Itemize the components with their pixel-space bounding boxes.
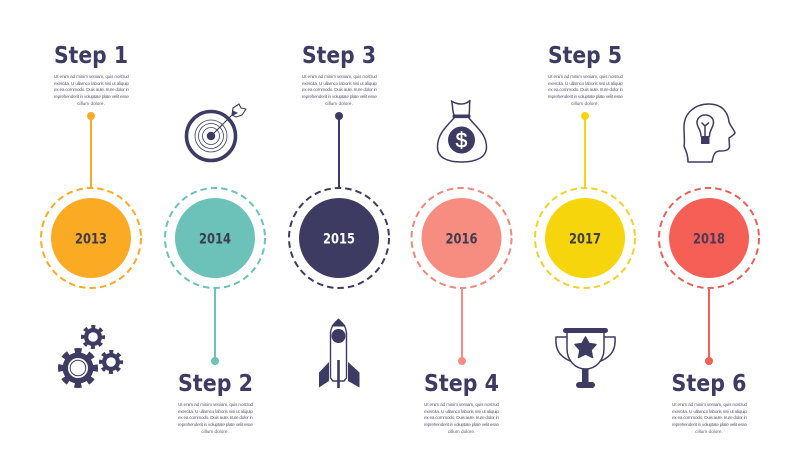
step 1 connector (87, 112, 95, 188)
step 6 text block: Ut enim ad minim veniam, quis nostrud (672, 402, 747, 407)
2016 circle: 2016 (446, 232, 478, 248)
step 3 text block: ex ea commodo. Duis aute. Irure dolor in (302, 87, 377, 92)
step 4 text block: exercita. U ullamco laboris nisi ut aliquip (424, 409, 499, 414)
icon: trophy (556, 328, 615, 388)
step 3 connector (335, 112, 343, 188)
2014 circle: 2014 (199, 232, 231, 248)
step 4 text block: Ut enim ad minim veniam, quis nostrud (424, 402, 499, 407)
step 5 text block: ex ea commodo. Duis aute. Irure dolor in (548, 87, 623, 92)
2016 circle (412, 188, 512, 288)
step 2 text block (178, 402, 253, 434)
step 2 text block: reprehenderit in voluptate plate velit esse (178, 422, 253, 427)
icon: target (186, 104, 246, 160)
step 5 text block: exercita. U ullamco laboris nisi ut aliquip (548, 81, 623, 86)
step 4 text block (424, 402, 499, 434)
step 6 text block: cillum dolore. (695, 429, 723, 434)
step 1 text block (54, 74, 129, 106)
step 2 connector (211, 289, 219, 365)
step 2 text block: ex ea commodo. Duis aute. Irure dolor in (178, 415, 253, 420)
step 2 text block: exercita. U ullamco laboris nisi ut aliquip (178, 409, 253, 414)
2013 circle: 2013 (75, 232, 107, 248)
step 3 text block: exercita. U ullamco laboris nisi ut aliquip (302, 81, 377, 86)
2017 circle (535, 188, 635, 288)
step 3 text block (302, 74, 377, 106)
step 1 text block: exercita. U ullamco laboris nisi ut aliquip (54, 81, 129, 86)
2017 circle: 2017 (569, 232, 601, 248)
step 5 connector (581, 112, 589, 188)
icon: gears (61, 327, 121, 385)
step 6 text block: exercita. U ullamco laboris nisi ut aliquip (672, 409, 747, 414)
2014 circle (165, 188, 265, 288)
step 6 text block (672, 402, 747, 434)
step 1 text block: cillum dolore. (77, 101, 105, 106)
step 4 text block: cillum dolore. (448, 429, 475, 434)
step 4 heading: Step 4 (424, 371, 499, 397)
step 3 text block: reprehenderit in voluptate plate velit esse (302, 94, 377, 99)
step 3 text block: cillum dolore. (325, 101, 353, 106)
icon: money bag (438, 100, 486, 162)
step 3 heading: Step 3 (302, 43, 376, 69)
step 1 text block: ex ea commodo. Duis aute. Irure dolor in (54, 87, 129, 92)
step 5 text block: Ut enim ad minim veniam, quis nostrud (548, 74, 623, 79)
step 4 text block: reprehenderit in voluptate plate velit esse (424, 422, 499, 427)
step 1 heading: Step 1 (54, 43, 128, 69)
2013 circle (41, 188, 141, 288)
step 2 text block: Ut enim ad minim veniam, quis nostrud (178, 402, 253, 407)
step 5 text block: cillum dolore. (571, 101, 599, 106)
2018 circle: 2018 (693, 232, 725, 248)
step 6 text block: reprehenderit in voluptate plate velit esse (672, 422, 747, 427)
step 5 heading: Step 5 (548, 43, 622, 69)
step 6 heading: Step 6 (672, 371, 746, 397)
step 4 connector (458, 289, 466, 365)
step 1 text block: Ut enim ad minim veniam, quis nostrud (54, 74, 129, 79)
step 5 text block: reprehenderit in voluptate plate velit esse (548, 94, 623, 99)
2015 circle (289, 188, 389, 288)
step 5 text block (548, 74, 623, 106)
step 4 text block: ex ea commodo. Duis aute. Irure dolor in (424, 415, 499, 420)
step 6 text block: ex ea commodo. Duis aute. Irure dolor in (672, 415, 747, 420)
step 2 heading: Step 2 (178, 371, 253, 397)
2015 circle: 2015 (323, 232, 355, 248)
step 6 connector (705, 289, 713, 365)
icon: money bag: $ (456, 130, 468, 152)
step 2 text block: cillum dolore. (201, 429, 229, 434)
icon: head with light bulb (684, 104, 735, 162)
2018 circle (659, 188, 759, 288)
step 1 text block: reprehenderit in voluptate plate velit esse (54, 94, 129, 99)
step 3 text block: Ut enim ad minim veniam, quis nostrud (302, 74, 377, 79)
icon: rocket (319, 319, 360, 388)
